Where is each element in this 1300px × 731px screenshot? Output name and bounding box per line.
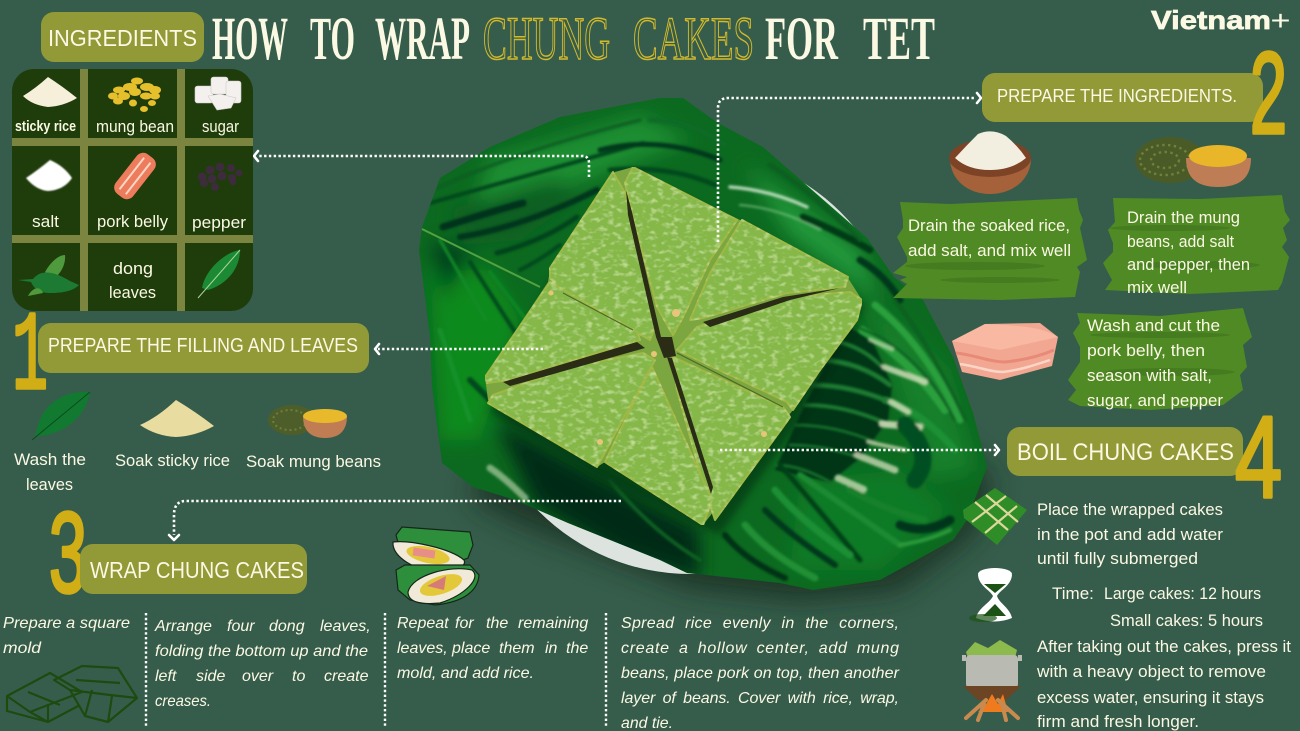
cake dark filling slits [503,190,840,494]
text: arrange leaves: to [292,668,305,685]
text: Drain the soaked rice, [908,216,1070,235]
lower-left highlight [490,468,525,498]
brush box 2 [1103,195,1290,297]
logo: Vietnam+: Vietnam [1151,5,1271,35]
lower-right ribs [780,465,860,560]
dotted separators [146,613,606,728]
thin crease lines [563,293,783,407]
text: arrange leaves: over [242,668,274,685]
text: repeat: place [451,640,490,657]
heading text: PREPARE THE INGREDIENTS. [997,85,1237,106]
cake base [485,167,862,525]
icon: salt pile [26,160,72,191]
number 1: 1 [12,295,48,422]
icon: sticky rice pile [23,77,77,107]
text: arrange leaves: dong [269,618,305,635]
text: arrange leaves: folding the bottom up and the [155,643,368,660]
dark zone light ribs [830,340,880,365]
icon: dong leaf pair [18,255,79,296]
leaf [410,90,1000,600]
heading pill [1007,427,1243,476]
pale sunlit ring patches [870,340,892,349]
title: TET [863,6,935,73]
heading text: WRAP CHUNG CAKES [90,557,304,583]
icon: mung beans and bowl [268,405,347,438]
text: spread rice: beans, place pork on top, then another [621,665,900,682]
number 4: 4 [1235,392,1282,522]
title: CAKES [633,6,754,73]
text block: time: Small cakes: 5 hours [1110,611,1263,630]
text: repeat: leaves, [397,640,448,657]
text: spread rice [621,615,900,731]
text block: time: Large cakes: 12 hours [1104,584,1261,603]
heading text: BOIL CHUNG CAKES [1017,439,1234,466]
title: WRAP [375,6,470,73]
text: arrange leaves: side [196,668,225,685]
icon: rice pile [140,400,214,437]
step 3 panel: wrap chung cakes [3,490,900,731]
ingredient labels: sugar [202,117,239,136]
brush box 3: season with salt, [1087,366,1212,385]
text: repeat: Repeat [397,615,449,632]
ingredient labels [15,117,246,302]
text block: press: After taking out the cakes, press it [1037,637,1291,656]
text: repeat: mold, and add rice. [397,665,534,682]
text block: press: firm and fresh longer. [1037,712,1199,731]
text: Drain the mung [1127,208,1240,227]
ingredient labels: salt [32,212,59,231]
cake shadow [490,175,865,535]
icon: pork belly slice [111,150,159,202]
title [212,6,935,73]
icon: peppercorns [198,162,242,191]
ingredient labels: pepper [192,213,246,232]
top-right highlights and ribs [730,187,807,207]
text: repeat: in [545,640,558,657]
icon: rice bowl [949,131,1031,194]
text: prepare mold: mold [3,640,42,657]
title: FOR [765,6,839,73]
dotted arrow: to filling and leaves [375,344,543,354]
icon: mung bean cluster [108,78,161,112]
icon: pork belly [952,323,1058,380]
text: repeat: the [566,640,588,657]
text block: time [1052,584,1263,630]
brush box 3 [1068,308,1252,410]
text: arrange leaves [154,618,371,710]
ingredient labels: sticky rice [15,118,76,135]
heading pill [982,73,1263,122]
text: arrange leaves: four [227,618,255,635]
brush box 1: add salt, and mix well [908,241,1071,260]
number 3: 3 [49,490,87,617]
text: arrange leaves: create [324,668,369,685]
text: repeat: the [486,615,508,632]
ingredient labels: dong [113,259,153,278]
heading pill [38,323,369,373]
midrib [422,229,540,287]
upper ribs [430,143,643,203]
panel: ingredients grid [12,69,253,311]
title: CHUNG [483,6,610,73]
text: arrange leaves: leaves, [320,618,371,635]
brush box 1 [893,198,1087,300]
leaf shadow [470,400,995,602]
text: repeat: remaining [518,615,588,632]
logo: Vietnam+: + [1270,5,1290,36]
text block: place cakes: in the pot and add water [1037,525,1223,544]
brush box 2: mix well [1127,278,1187,297]
step 2 panel: prepare the ingredients [893,28,1290,410]
text: Wash and cut the [1087,316,1220,335]
central photo: chung cake on leaf and plate [410,90,1000,602]
dotted arrow: to boil [720,445,999,455]
icon: pot on fire [962,640,1022,720]
heading text: PREPARE THE FILLING AND LEAVES [48,335,358,357]
left fan ribs [440,240,486,320]
icon: sliced cake roll [393,527,479,605]
title: HOW [212,6,288,73]
ingredient labels: leaves [109,283,156,302]
mung bean crumbs [548,290,767,445]
brush box 2: beans, add salt [1127,232,1234,251]
icon: leaf [32,392,90,440]
icon: sugar cubes [195,77,241,110]
text block: press: excess water, ensuring it stays [1037,688,1264,707]
dotted arrow: to ingredients [254,151,589,177]
lower ribs [610,480,700,560]
icon: wrapped cake [963,488,1027,545]
text block: press: with a heavy object to remove [1036,662,1266,681]
cake: eight triangular rice panels [485,167,862,525]
step 1 panel: prepare the filling and leaves [12,295,381,494]
title: TO [310,6,355,73]
captions [14,450,381,494]
text: arrange leaves: creases. [155,693,211,710]
text: prepare mold [3,615,130,657]
text: repeat: for [455,615,474,632]
ingredient labels: mung bean [96,117,174,136]
captions: Soak sticky rice [115,451,230,470]
text: prepare mold: Prepare a square [3,615,130,632]
heading pill [80,544,307,594]
icon: single banana leaf [198,250,240,298]
text: spread rice: layer of beans. Cover with rice, wrap, [621,690,899,707]
ingredient labels: pork belly [97,212,168,231]
text: arrange leaves: Arrange [154,618,212,635]
heading: ingredients: INGREDIENTS [48,25,197,51]
text block: place cakes: Place the wrapped cakes [1037,500,1223,519]
text block: place cakes [1037,500,1223,568]
dotted arrow: to wrap [169,501,621,540]
text: repeat [397,615,588,682]
step 4 panel: boil chung cakes [962,392,1291,731]
right outer ribs [862,330,945,410]
text: arrange leaves: left [155,668,177,685]
text: spread rice: create a hollow center, add mung [621,640,899,657]
text: repeat: them [499,640,535,657]
text: spread rice: Spread rice evenly in the corners, [621,615,899,632]
icon: mold outline [7,666,137,722]
text block: place cakes: until fully submerged [1037,549,1198,568]
icon: hourglass [969,568,1012,622]
captions: Wash the [14,450,86,469]
brush box 3: sugar, and pepper [1087,391,1223,410]
soft tonal zones [430,115,975,580]
text block: press [1036,637,1291,731]
heading: ingredients [41,12,204,62]
dark shadow under cake right side [775,325,892,482]
dotted arrow: to prepare the ingredients [718,93,981,242]
brush box 3: pork belly, then [1087,341,1205,360]
plate [477,150,903,574]
brush box 2: and pepper, then [1127,255,1250,274]
captions: Soak mung beans [246,452,381,471]
captions: leaves [26,475,73,494]
icon: mung beans and bowl [1135,137,1251,187]
text block: time: Time: [1052,584,1094,603]
